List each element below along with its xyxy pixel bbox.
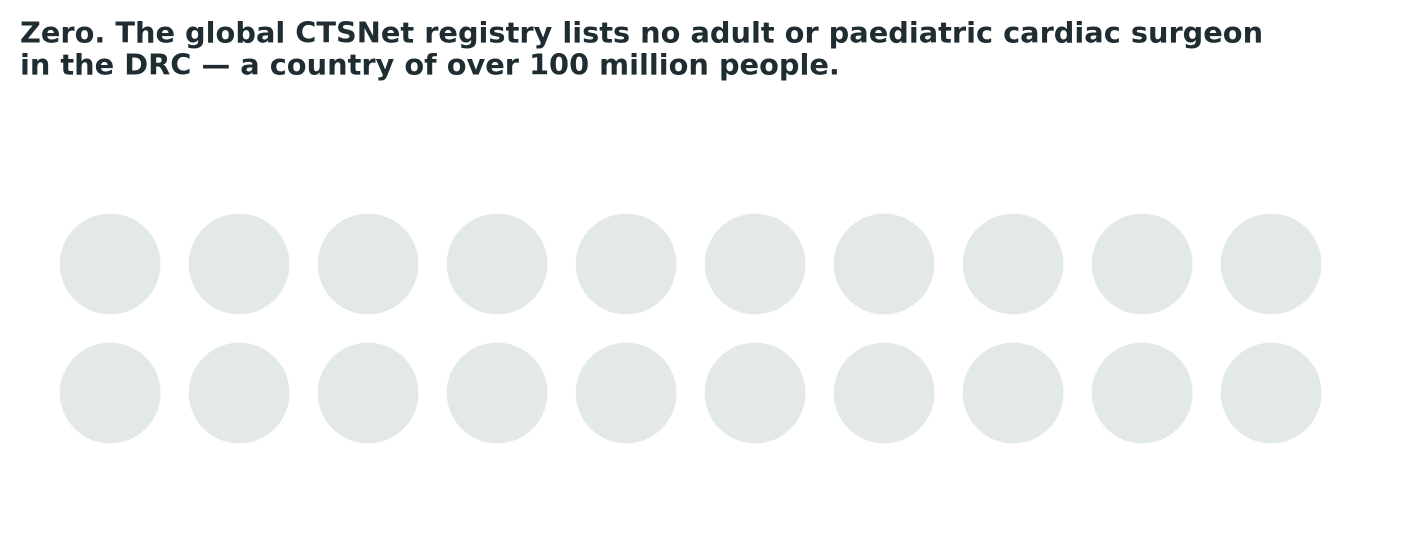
title: Zero. The global CTSNet registry lists no adult or paediatric cardiac surgeon — [20, 16, 1263, 50]
dot row 1 — [60, 214, 1322, 314]
title: in the DRC — a country of over 100 million people. — [20, 48, 840, 82]
dot row 2 — [60, 343, 1322, 443]
title — [20, 16, 1263, 82]
dot grid: 20 empty surgeon markers — [60, 214, 1322, 443]
